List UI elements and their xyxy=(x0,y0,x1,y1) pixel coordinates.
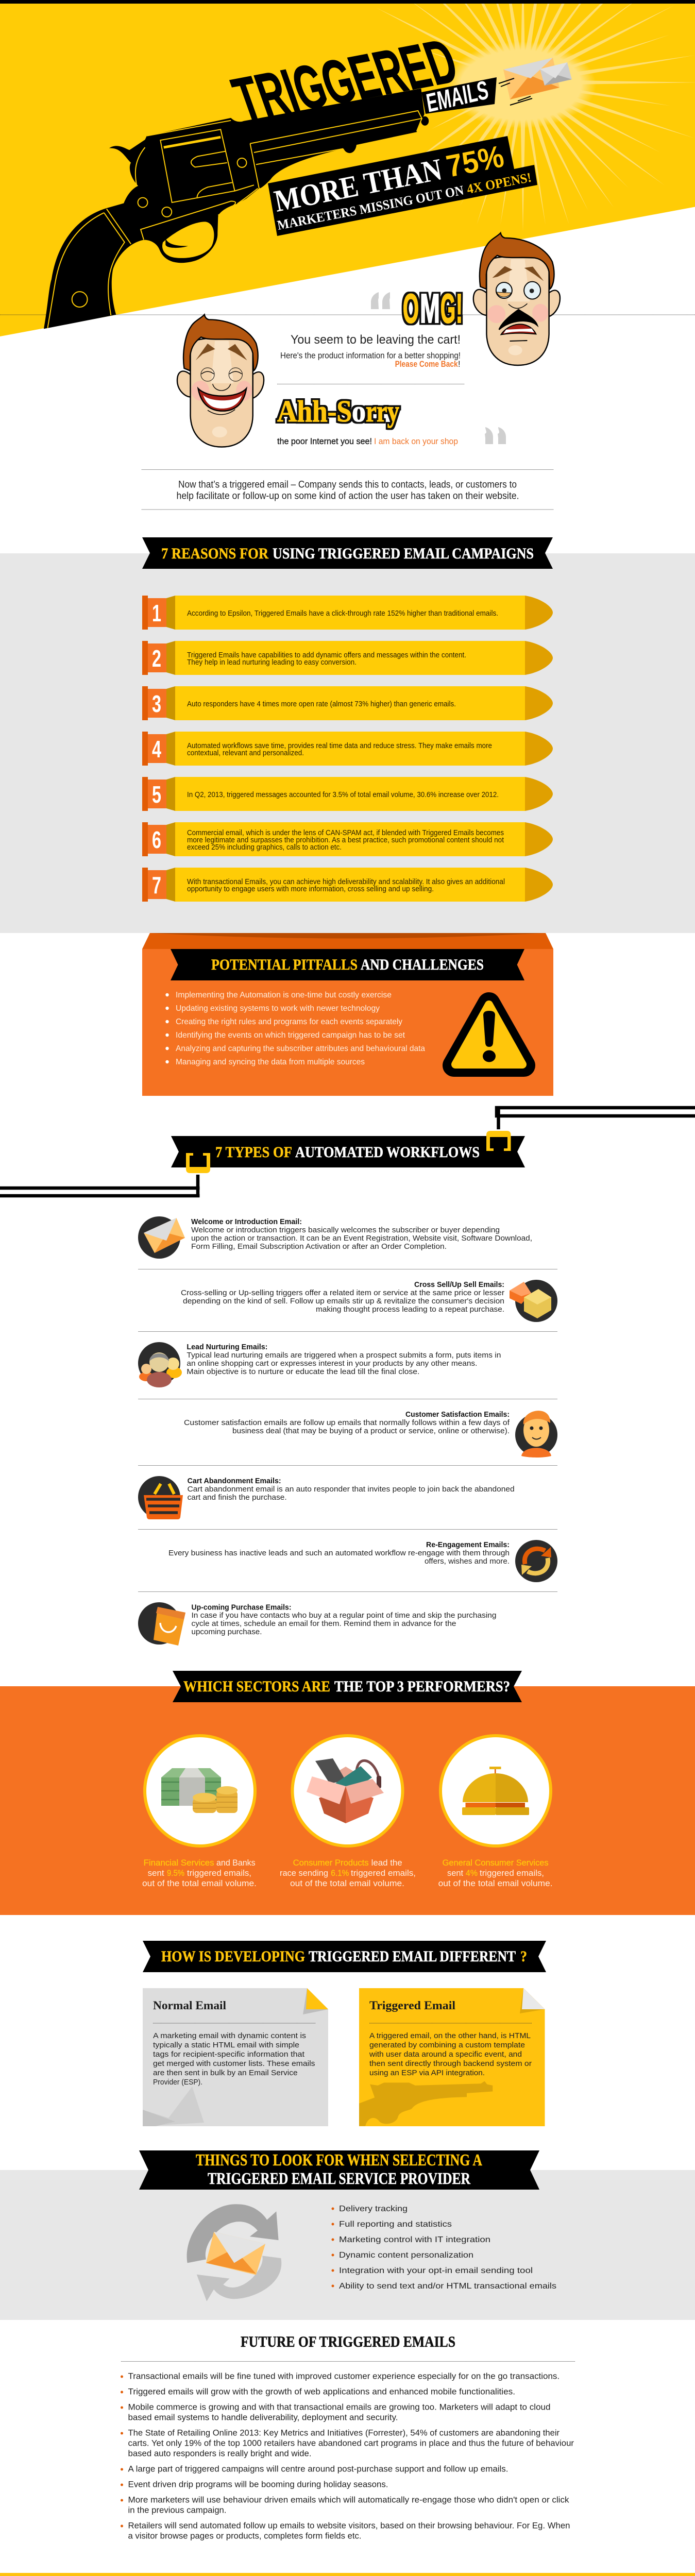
plug left xyxy=(186,1153,210,1173)
heading white part: TRIGGERED EMAIL DIFFERENT xyxy=(309,1948,516,1965)
circle badge xyxy=(145,1736,255,1846)
envelope flap xyxy=(142,933,553,949)
description: business deal (that may be buying of a product or service, online or otherwise). xyxy=(232,1427,510,1435)
future list text: The State of Retailing Online 2013: Key Metrics and Initiatives (Forrester), 54% of customers are abandoning their xyxy=(128,2429,560,2438)
hero panel xyxy=(0,0,695,336)
description: Main objective is to nurture or educate the lead till the final close. xyxy=(187,1367,419,1376)
heading yellow part: 7 REASONS FOR xyxy=(161,545,268,562)
card title: Normal Email xyxy=(153,1999,226,2012)
EMAILS word: EMAILS xyxy=(424,75,490,118)
future list text: in the previous campaign. xyxy=(128,2506,227,2515)
reason 1: According to Epsilon, Triggered Emails have a click-through rate 152% higher than traditional emails. xyxy=(187,609,498,618)
heading: OMG: G xyxy=(440,285,455,331)
panel: checklist download xyxy=(0,2573,695,2576)
icon: people xyxy=(138,1342,182,1387)
card: triggered email xyxy=(359,1988,545,2126)
sector 2 text: 6.1% xyxy=(331,1869,349,1878)
item 4: Dynamic content personalization xyxy=(339,2251,473,2260)
sector 3 text: General Consumer Services xyxy=(443,1858,549,1868)
future list text: Retailers will send automated follow up emails to website visitors, based on their browsing behaviour. For Eg. When xyxy=(128,2521,570,2531)
sector 3: consumer services xyxy=(438,1736,553,1888)
reason 7: 7 xyxy=(152,872,161,899)
ribbon shape xyxy=(142,537,553,569)
item 5: Integration with your opt-in email sending tool xyxy=(339,2266,533,2275)
description xyxy=(192,1611,497,1636)
future list text: carts. Yet only 19% of the top 1000 retailers have abandoned cart programs in place and thus the future of behaviour xyxy=(128,2439,574,2448)
icon: opening quote xyxy=(371,292,390,309)
future list text: A large part of triggered campaigns will centre around post-purchase support and follow up emails. xyxy=(128,2465,508,2474)
title: TRIGGERED: TRIGGERED xyxy=(225,27,466,134)
reason 7: opportunity to engage users with more information, cross selling and up selling. xyxy=(187,885,434,893)
future list text: Transactional emails will be fine tuned with improved customer experience especially for on the go transactions. xyxy=(128,2372,560,2381)
card: normal email xyxy=(143,1988,328,2126)
sector 3 text xyxy=(438,1858,553,1888)
ribbon shape xyxy=(139,2150,539,2190)
card text xyxy=(153,2031,315,2087)
card text: then sent directly through backend system or xyxy=(369,2059,532,2068)
watermark revolver xyxy=(359,2081,493,2126)
card text: tags for recipient-specific information that xyxy=(153,2050,305,2059)
text: leaving cart: You seem to be leaving the cart! xyxy=(291,333,461,347)
plug right xyxy=(486,1131,511,1151)
description: Welcome or introduction triggers basically welcomes the subscriber or buyer depending xyxy=(191,1226,500,1234)
description xyxy=(181,1289,504,1314)
icon: envelope xyxy=(138,1216,185,1259)
reason 4: contextual, relevant and personalized. xyxy=(187,749,304,757)
icon: basket xyxy=(138,1476,183,1519)
feature list xyxy=(332,2205,556,2291)
reason 4 xyxy=(142,732,553,766)
intro text block xyxy=(142,470,553,510)
future list text: a visitor browse pages or products, completes form fields etc. xyxy=(128,2532,362,2541)
item 6: Ability to send text and/or HTML transactional emails xyxy=(339,2282,556,2291)
flap shadow xyxy=(150,933,546,939)
sector 1 text: triggered emails, xyxy=(187,1869,251,1878)
icon: warning sign xyxy=(454,1004,524,1065)
card text: A marketing email with dynamic content is xyxy=(153,2031,306,2040)
card title: Triggered Email xyxy=(369,1999,455,2012)
icon: customer xyxy=(515,1411,557,1458)
heading yellow part: HOW IS DEVELOPING xyxy=(161,1948,305,1965)
panel: workflows xyxy=(0,1108,695,1646)
reason 2: They help in lead nurturing leading to easy conversion. xyxy=(187,658,357,667)
panel: things to look for xyxy=(0,2150,695,2320)
reason 6 xyxy=(142,822,553,856)
trigger xyxy=(165,239,188,248)
rry: rry xyxy=(366,394,399,428)
folded corner xyxy=(520,1988,545,2013)
reason 5: 5 xyxy=(152,781,161,808)
o: o xyxy=(352,394,366,428)
reason 3 xyxy=(142,686,553,720)
sector 3 text: 4% xyxy=(466,1869,478,1878)
reason 2 xyxy=(142,641,553,675)
future list text: Mobile commerce is growing and with that transactional emails are growing too. Marketers will adapt to cloud xyxy=(128,2403,550,2412)
reason 4: Automated workflows save time, provides real time data and reduce stress. They make emails more xyxy=(187,742,492,750)
headline badge xyxy=(268,136,537,236)
description: Form Filling, Email Subscription Activation or after an Order Completion. xyxy=(191,1242,447,1251)
heading white part: AUTOMATED WORKFLOWS xyxy=(295,1144,480,1161)
icon: flying envelopes xyxy=(499,58,572,105)
sector 3 text: out of the total email volume. xyxy=(438,1879,553,1888)
item 3: Marketing control with IT integration xyxy=(339,2235,490,2244)
description: Cross-selling or Up-selling triggers offer a related item or service at the same price or lesser xyxy=(181,1289,504,1297)
future list text xyxy=(128,2372,574,2541)
description: cycle at times, schedule an email for them. Remind them in advance for the xyxy=(192,1619,456,1628)
pitfall 5: Analyzing and capturing the subscriber attributes and behavioural data xyxy=(176,1044,425,1053)
circle badge xyxy=(293,1736,403,1846)
description: Every business has inactive leads and such an automated workflow re-engage with them through xyxy=(168,1549,510,1557)
sector 2 text: Consumer Products xyxy=(293,1858,369,1868)
heading ribbon xyxy=(142,537,553,569)
card body xyxy=(143,1988,328,2126)
heading: OMG xyxy=(403,285,463,331)
headline: more than 75%: MORE THAN xyxy=(272,152,445,218)
panel: top 3 sectors xyxy=(0,1671,695,1915)
circle badge xyxy=(440,1736,551,1846)
sector 1 text: and Banks xyxy=(216,1858,256,1868)
sector 1 text xyxy=(142,1858,257,1888)
character: scared man xyxy=(473,233,560,365)
workflow 2: cross sell xyxy=(181,1280,557,1322)
ribbon shape xyxy=(173,1671,522,1702)
front sight xyxy=(421,116,429,126)
text: the poor internet: the poor Internet you see! xyxy=(277,436,372,446)
heading ribbon xyxy=(171,1136,525,1167)
reason 4: 4 xyxy=(152,736,161,762)
heading yellow part: POTENTIAL PITFALLS xyxy=(211,956,358,973)
card text: with user data around a specific event, and xyxy=(369,2050,522,2059)
list bullets xyxy=(121,2375,123,2528)
description xyxy=(184,1418,510,1435)
panel: future of triggered emails xyxy=(121,2333,575,2541)
card text: A triggered email, on the other hand, is HTML xyxy=(369,2031,531,2040)
trigger guard opening xyxy=(162,222,214,258)
ribbon shape xyxy=(171,1136,525,1167)
reason 1 xyxy=(142,596,553,630)
item 2: Full reporting and statistics xyxy=(339,2220,452,2229)
diagonal yellow background xyxy=(0,4,695,336)
workflow 6: re-engagement xyxy=(168,1540,557,1582)
sector 1: financial xyxy=(142,1736,257,1888)
description: an online shopping cart or expresses interest in your products by any other means. xyxy=(187,1359,477,1368)
text: please come back: Please Come Back xyxy=(395,360,458,369)
ribbon shape xyxy=(171,949,524,980)
description: upcoming purchase. xyxy=(192,1628,262,1636)
divider xyxy=(369,2023,532,2024)
sector 3 text: triggered emails, xyxy=(480,1869,544,1878)
title: Welcome or Introduction Email: xyxy=(191,1217,302,1226)
heading ribbon xyxy=(173,1671,522,1702)
heading line 1: THINGS TO LOOK FOR WHEN SELECTING A xyxy=(196,2150,482,2169)
watermark envelope xyxy=(143,2087,204,2126)
icon: sync xyxy=(515,1540,557,1582)
reason 2: Triggered Emails have capabilities to add dynamic offers and messages within the content. xyxy=(187,651,466,659)
text: exclamation: ! xyxy=(458,360,461,369)
sector 2 text: race sending xyxy=(280,1869,328,1878)
sunburst glow xyxy=(446,42,596,128)
list bullets xyxy=(165,993,169,1063)
list bullets xyxy=(332,2207,334,2287)
intro line 2: help facilitate or follow-up on some kind of action the user has taken on their website. xyxy=(176,490,519,502)
pitfalls list xyxy=(165,991,425,1066)
future list text: Event driven drip programs will be booming during holiday seasons. xyxy=(128,2480,388,2489)
sector 1 text: sent xyxy=(148,1869,164,1878)
title: Customer Satisfaction Emails: xyxy=(405,1410,510,1419)
title: Up-coming Purchase Emails: xyxy=(192,1603,292,1612)
heading question mark: ? xyxy=(520,1948,527,1965)
panel: how is it different xyxy=(143,1941,546,2126)
heading ribbon xyxy=(139,2150,539,2190)
sector 2 text: out of the total email volume. xyxy=(290,1879,404,1888)
heading yellow part: 7 TYPES OF xyxy=(215,1144,292,1161)
quote panel: ! xyxy=(456,285,463,331)
icon: revolver xyxy=(44,89,429,329)
title: Lead Nurturing Emails: xyxy=(187,1343,267,1351)
future list text: Triggered emails will grow with the growth of web applications and enhanced mobile functionalities. xyxy=(128,2387,515,2397)
icon: boxes xyxy=(510,1280,557,1322)
icon: service bell xyxy=(462,1767,529,1815)
divider xyxy=(142,509,553,510)
future list text: based email systems to handle deliverability, deployment and security. xyxy=(128,2413,398,2422)
gun silhouette xyxy=(44,89,425,329)
workflow 3: lead nurturing xyxy=(138,1342,501,1387)
panel: potential pitfalls xyxy=(142,933,553,1096)
quote panel xyxy=(177,233,560,447)
icon: closing quote xyxy=(485,427,506,444)
pitfall 3: Creating the right rules and programs for each events separately xyxy=(176,1018,402,1026)
reason 7 xyxy=(142,868,553,902)
yellow band xyxy=(0,2573,695,2576)
card body xyxy=(359,1988,545,2126)
text: back on shop: I am back on your shop xyxy=(374,436,458,446)
sector 2: consumer products xyxy=(280,1736,416,1888)
reason 6: 6 xyxy=(152,826,161,853)
reason 6: exceed 25% including graphics, calls to action etc. xyxy=(187,843,342,852)
heading: FUTURE OF TRIGGERED EMAILS xyxy=(241,2333,455,2350)
grey section background xyxy=(0,553,695,933)
badge shape xyxy=(268,136,537,236)
pitfall 1: Implementing the Automation is one-time but costly exercise xyxy=(176,991,392,999)
sector 2 text: lead the xyxy=(371,1858,402,1868)
reason 5: In Q2, 2013, triggered messages accounted for 3.5% of total email volume, 30.6% increase over 2012. xyxy=(187,791,499,799)
pitfall 6: Managing and syncing the data from multiple sources xyxy=(176,1058,365,1066)
card text: Provider (ESP). xyxy=(153,2078,202,2087)
text: product information: Here's the product information for a better shopping! xyxy=(280,351,461,361)
heading ribbon xyxy=(143,1941,546,1972)
title: Cross Sell/Up Sell Emails: xyxy=(414,1280,504,1289)
description: making thought process leading to a repeat purchase. xyxy=(316,1305,504,1314)
card text xyxy=(369,2031,532,2077)
subhead highlight: 4X OPENS! xyxy=(466,170,533,197)
gun yellow linework xyxy=(47,111,422,328)
description: Customer satisfaction emails are follow up emails that normally follows within a few days of xyxy=(184,1418,510,1427)
description: upon the action or transaction. It can be an Event Registration, Website visit, Software Download, xyxy=(191,1234,532,1243)
workflow 5: cart abandonment xyxy=(138,1476,515,1519)
intro line 1: Now that’s a triggered email – Company sends this to contacts, leads, or customers to xyxy=(178,479,517,490)
panel: 7 reasons xyxy=(0,537,695,933)
reason 2: 2 xyxy=(152,645,161,672)
description: depending on the kind of sell. Follow up emails stir up & revitalize the consumer's decision xyxy=(183,1297,504,1306)
title ribbon: EMAILS xyxy=(421,75,497,118)
card text: typically a static HTML email with simple xyxy=(153,2041,299,2049)
icon: bag xyxy=(138,1602,185,1646)
pitfall 2: Updating existing systems to work with newer technology xyxy=(176,1004,380,1013)
heading white part: USING TRIGGERED EMAIL CAMPAIGNS xyxy=(273,545,534,562)
icon: open box xyxy=(307,1758,384,1823)
sector 1 text: out of the total email volume. xyxy=(142,1879,257,1888)
character: smiling man xyxy=(177,315,264,447)
card text: generated by combining a custom template xyxy=(369,2041,525,2049)
description xyxy=(168,1549,510,1566)
Ahh-S: Ahh-S xyxy=(277,394,352,428)
cable bottom left xyxy=(0,1175,200,1197)
ribbon shape xyxy=(143,1941,546,1972)
description: cart and finish the purchase. xyxy=(188,1493,287,1502)
description: Cart abandonment email is an auto responder that invites people to join back the abandoned xyxy=(188,1485,515,1494)
card text: using an ESP via API integration. xyxy=(369,2069,485,2077)
heading white part: AND CHALLENGES xyxy=(361,956,484,973)
card text: are then sent in bulk by an Email Service xyxy=(153,2069,298,2077)
motion lines xyxy=(499,78,532,105)
item 1: Delivery tracking xyxy=(339,2205,408,2213)
heading: OMG: O xyxy=(403,285,419,331)
icon: money and coins xyxy=(161,1768,238,1813)
heading yellow part: WHICH SECTORS ARE xyxy=(183,1678,330,1695)
heading line 2: TRIGGERED EMAIL SERVICE PROVIDER xyxy=(208,2169,471,2188)
divider xyxy=(277,383,464,384)
description: In case if you have contacts who buy at a regular point of time and skip the purchasing xyxy=(192,1611,497,1620)
sector 2 text: triggered emails, xyxy=(351,1869,416,1878)
sector 1 text: Financial Services xyxy=(144,1858,214,1868)
pitfall 4: Identifying the events on which triggered campaign has to be set xyxy=(176,1031,405,1040)
folded corner xyxy=(303,1988,328,2014)
workflow 7: upcoming purchase xyxy=(138,1602,497,1646)
top black strip xyxy=(0,0,695,4)
heading ribbon xyxy=(171,949,524,980)
cable top right xyxy=(497,1108,695,1129)
reason 7: With transactional Emails, you can achieve high deliverability and scalability. It also gives an additional xyxy=(187,878,505,886)
divider xyxy=(153,2023,315,2024)
sector 2 text xyxy=(280,1858,416,1888)
grey background xyxy=(0,2170,695,2320)
description xyxy=(187,1351,501,1376)
orange body xyxy=(142,949,553,1096)
dotted image outline xyxy=(0,314,695,315)
reason 6: Commercial email, which is under the lens of CAN-SPAM act, if blended with Triggered Emails becomes xyxy=(187,829,504,837)
workflow 4: customer satisfaction xyxy=(184,1410,557,1458)
heading white part: THE TOP 3 PERFORMERS? xyxy=(334,1678,510,1695)
orange background xyxy=(0,1686,695,1915)
future list text: More marketers will use behaviour driven emails which will automatically re-engage those who didn't open or click xyxy=(128,2496,569,2505)
OMG letter M: M xyxy=(420,285,440,331)
divider xyxy=(142,469,553,470)
heading: Ahh-Sorry xyxy=(277,394,399,428)
reason 3: Auto responders have 4 times more open rate (almost 73% higher) than generic emails. xyxy=(187,700,456,708)
reason 3: 3 xyxy=(152,690,161,717)
description: offers, wishes and more. xyxy=(425,1557,510,1566)
workflow 1: welcome xyxy=(138,1216,532,1259)
reason 6: more legitimate and surpasses the prohibition. As a best practice, such promotional content should not xyxy=(187,836,504,844)
small envelope xyxy=(540,62,572,86)
reason 5 xyxy=(142,777,553,811)
title: Cart Abandonment Emails: xyxy=(188,1477,281,1485)
headline number: 75% xyxy=(444,139,506,184)
description xyxy=(188,1485,515,1502)
title: Re-Engagement Emails: xyxy=(426,1540,510,1549)
description: Typical lead nurturing emails are triggered when a prospect submits a form, puts items in xyxy=(187,1351,501,1360)
card text: get merged with customer lists. These emails xyxy=(153,2059,315,2068)
sector 3 text: sent xyxy=(447,1869,463,1878)
sunburst rays xyxy=(375,0,695,232)
large envelope xyxy=(503,58,560,99)
reason 1: 1 xyxy=(152,600,161,626)
sector 1 text: 9.5% xyxy=(167,1869,184,1878)
icon: refresh with envelope xyxy=(187,2204,281,2301)
future list text: based auto responders is really bright and wide. xyxy=(128,2449,311,2459)
description xyxy=(191,1226,532,1251)
ribbon shape xyxy=(421,77,497,114)
subhead: MARKETERS MISSING OUT ON xyxy=(276,182,465,233)
